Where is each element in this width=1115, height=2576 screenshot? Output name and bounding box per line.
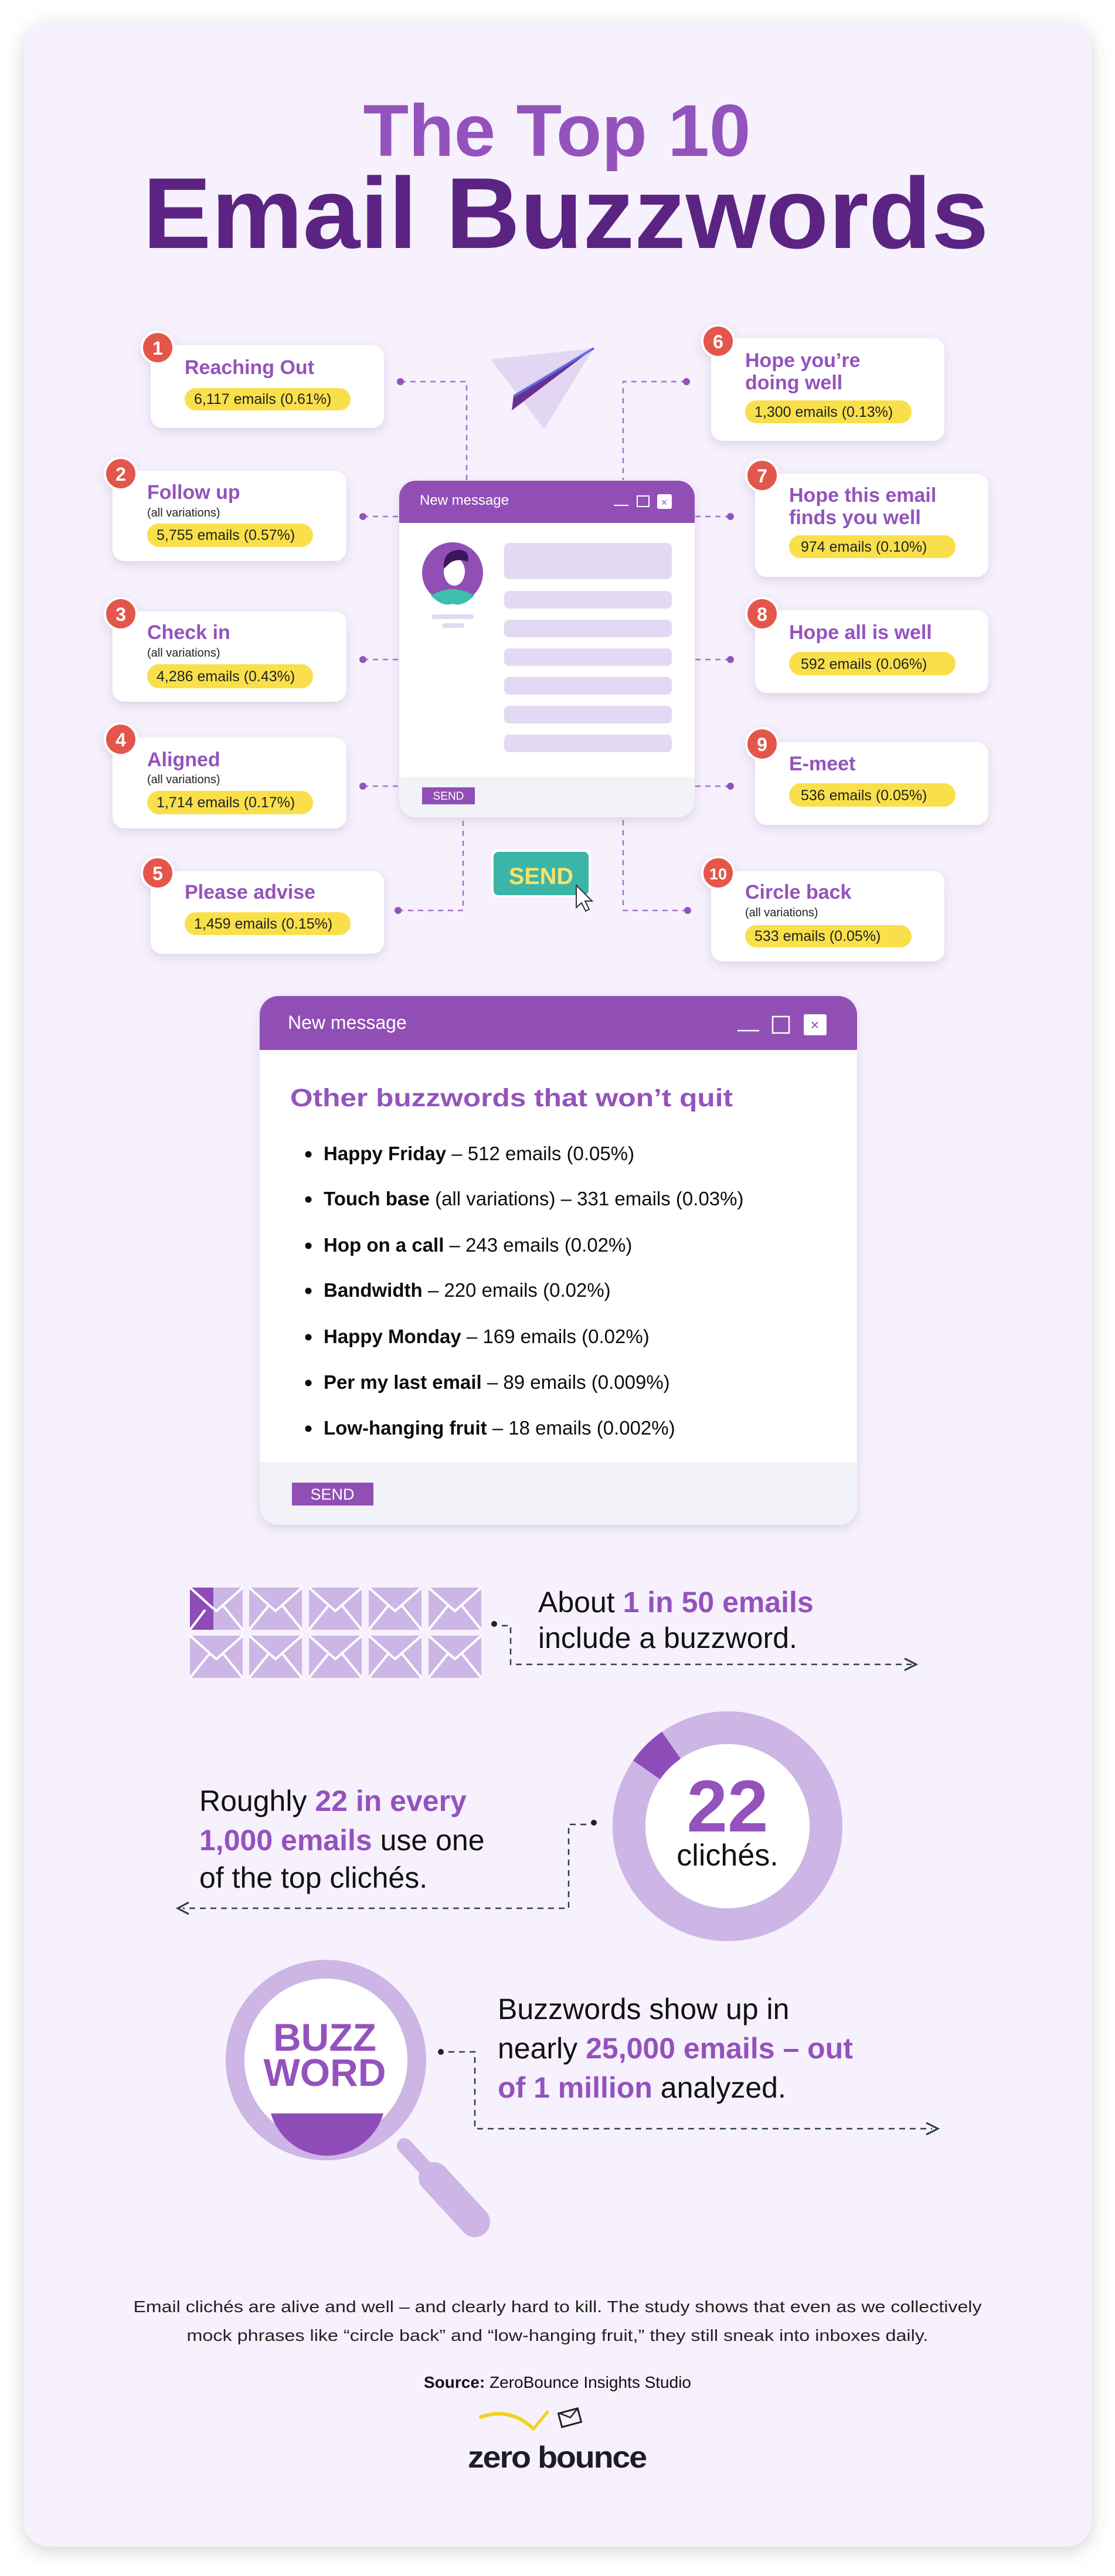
text: 22 in every 1000: Roughly 22 in every <box>199 1785 467 1817</box>
panel: item 5: 5 <box>152 863 163 884</box>
text block: conclusion: mock phrases like “circle back” and “low-hanging fruit,” they still sneak into inboxes daily. <box>186 2326 929 2344</box>
panel: item 4: (all variations) <box>147 773 220 786</box>
panel: item 3: (all variations) <box>147 647 220 660</box>
panel: item 10: (all variations) <box>745 906 818 919</box>
panel: item 6: Hope you’re <box>745 349 860 372</box>
text: 25,000 emails: of 1 million analyzed. <box>498 2071 786 2104</box>
panel: item 4: 1,714 emails (0.17%) <box>157 794 295 811</box>
panel: item 10: 533 emails (0.05%) <box>754 928 881 944</box>
icon: envelope grid <box>190 1588 481 1678</box>
text: 1 in 50: include a buzzword. <box>538 1622 797 1654</box>
panel: item 10: 10 <box>709 865 727 883</box>
panel: item 1 <box>142 332 384 428</box>
panel: item 6: 6 <box>713 331 723 352</box>
panel: item 1: Reaching Out <box>185 356 314 379</box>
panel: item 5: 1,459 emails (0.15%) <box>194 916 332 932</box>
panel: item 5 <box>142 857 384 954</box>
arrow: 25,000 <box>438 2049 938 2135</box>
panel: item 8: Hope all is well <box>789 621 932 644</box>
panel: item 7: 974 emails (0.10%) <box>801 539 927 555</box>
logo: zerobounce: zero bounce <box>468 2441 647 2475</box>
text: 22 in every 1000: of the top clichés. <box>199 1861 427 1894</box>
panel: item 3 <box>105 598 346 702</box>
panel: other buzzwords window: × <box>810 1016 820 1034</box>
text: 22 in every 1000 <box>199 1785 485 1894</box>
panel: item 8: 8 <box>757 604 767 625</box>
panel: other buzzwords window: Hop on a call – 243 emails (0.02%) <box>324 1234 632 1256</box>
title: The Top 10 <box>363 90 750 172</box>
panel: other buzzwords window: Low-hanging fruit – 18 emails (0.002%) <box>324 1417 675 1439</box>
panel: item 4 <box>105 723 346 828</box>
panel: item 2: (all variations) <box>147 507 220 519</box>
chart: 22 cliches donut: 22 <box>686 1766 769 1847</box>
text: 22 in every 1000: 1,000 emails use one <box>199 1824 485 1857</box>
panel: central email window: New message <box>420 492 509 508</box>
chart: 22 cliches donut <box>629 1728 826 1925</box>
panel: other buzzwords window: Happy Friday – 512 emails (0.05%) <box>324 1143 634 1164</box>
panel: item 3: 3 <box>115 604 126 625</box>
source: Source: ZeroBounce Insights Studio <box>424 2373 691 2391</box>
panel: item 2: 2 <box>115 464 126 485</box>
panel: other buzzwords window <box>260 996 857 1525</box>
panel: other buzzwords window: SEND <box>310 1486 355 1503</box>
connector lines <box>363 382 730 910</box>
panel: item 4: Aligned <box>147 749 220 771</box>
panel: item 9 <box>746 728 988 825</box>
panel: other buzzwords window: Bandwidth – 220 emails (0.02%) <box>324 1279 611 1301</box>
text: 1 in 50 <box>538 1586 814 1654</box>
panel: item 2: Follow up <box>147 481 240 504</box>
panel: item 1: 1 <box>152 338 163 359</box>
panel: item 7: Hope this email <box>789 484 936 507</box>
panel: central email window: SEND <box>433 790 464 803</box>
icon: send button with cursor <box>492 851 592 911</box>
panel: item 9: 536 emails (0.05%) <box>801 787 927 804</box>
icon: send button with cursor: SEND <box>509 864 573 889</box>
panel: item 2 <box>105 458 346 561</box>
panel: other buzzwords window: Other buzzwords that won’t quit <box>290 1084 733 1112</box>
arrow: 1 in 50 <box>491 1621 916 1670</box>
logo: zerobounce <box>468 2408 647 2475</box>
panel: item 8: 592 emails (0.06%) <box>801 656 927 672</box>
panel: item 2: 5,755 emails (0.57%) <box>157 527 295 543</box>
panel: central email window <box>399 481 695 817</box>
panel: item 10 <box>702 857 944 961</box>
text block: conclusion <box>134 2298 982 2344</box>
icon: paper plane <box>491 348 594 429</box>
panel: item 9: 9 <box>757 734 767 755</box>
panel: item 8 <box>746 598 988 693</box>
icon: magnifier buzzword: BUZZ <box>273 2016 376 2059</box>
panel: item 6 <box>702 325 944 441</box>
panel: item 1: 6,117 emails (0.61%) <box>194 391 331 407</box>
text: 25,000 emails: Buzzwords show up in <box>498 1993 789 2026</box>
arrow: cliches <box>178 1820 597 1914</box>
chart: 22 cliches donut: clichés. <box>677 1838 779 1872</box>
panel: item 3: 4,286 emails (0.43%) <box>157 668 295 685</box>
panel: item 7 <box>746 460 988 577</box>
text: 1 in 50: About 1 in 50 emails <box>538 1586 814 1619</box>
icon: magnifier buzzword <box>235 1969 475 2222</box>
panel: central email window: × <box>661 497 667 508</box>
panel: other buzzwords window: Touch base (all variations) – 331 emails (0.03%) <box>324 1188 743 1209</box>
panel: item 4: 4 <box>115 729 126 750</box>
panel: other buzzwords window: Happy Monday – 169 emails (0.02%) <box>324 1326 650 1347</box>
panel: item 7: finds you well <box>789 507 921 529</box>
icon: magnifier buzzword: WORD <box>264 2051 386 2094</box>
panel: item 5: Please advise <box>185 881 315 903</box>
text: 25,000 emails <box>498 1993 853 2104</box>
panel: item 7: 7 <box>757 465 767 487</box>
panel: other buzzwords window: Per my last email – 89 emails (0.009%) <box>324 1371 670 1393</box>
title <box>143 90 989 270</box>
panel: item 9: E-meet <box>789 753 855 775</box>
title: Email Buzzwords <box>143 157 989 270</box>
text block: conclusion: Email clichés are alive and well – and clearly hard to kill. The study shows that even as we collectively <box>134 2298 982 2316</box>
panel: item 6: 1,300 emails (0.13%) <box>754 404 893 420</box>
panel: item 10: Circle back <box>745 881 852 903</box>
panel: item 6: doing well <box>745 372 842 394</box>
text: 25,000 emails: nearly 25,000 emails – out <box>498 2032 853 2065</box>
panel: item 3: Check in <box>147 621 230 644</box>
panel: other buzzwords window: New message <box>288 1012 407 1033</box>
